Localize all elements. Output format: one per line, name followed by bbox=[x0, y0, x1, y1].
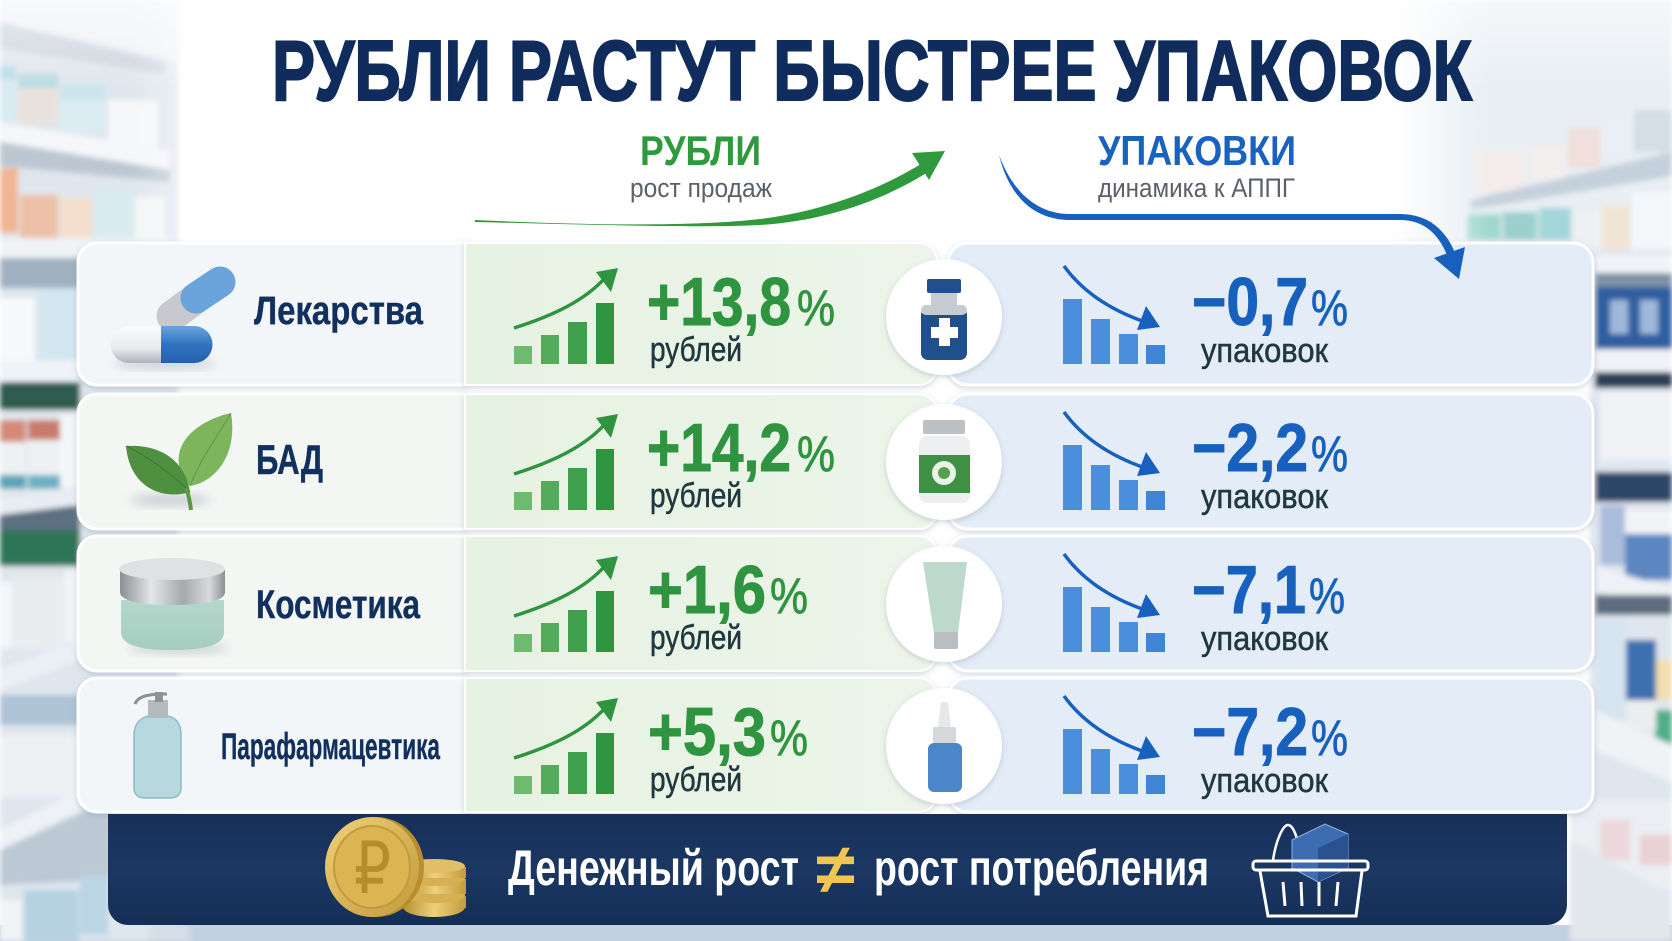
chart: growth bars bbox=[514, 414, 618, 510]
value: rubles bbox=[648, 694, 808, 799]
circle icon: medicine bottle bbox=[886, 259, 1002, 375]
value: packages: упаковок bbox=[1201, 620, 1329, 658]
value: packages: % bbox=[1311, 280, 1348, 336]
value: packages bbox=[1192, 694, 1348, 800]
circle icon: cosmetic tube bbox=[886, 546, 1002, 662]
panel: category bbox=[78, 536, 465, 671]
value: packages: −7,2 bbox=[1192, 694, 1308, 770]
label: Косметика bbox=[256, 583, 421, 627]
chart: declining bars bbox=[1063, 266, 1165, 364]
label: Парафармацевтика bbox=[221, 726, 440, 767]
value: packages bbox=[1192, 264, 1348, 370]
value: rubles bbox=[648, 552, 808, 657]
left shelves bbox=[0, 0, 178, 941]
chart: growth bars bbox=[514, 268, 618, 364]
arrow: rubles up bbox=[475, 151, 945, 226]
panel: category bbox=[78, 243, 465, 385]
value: rubles: % bbox=[797, 426, 835, 482]
icon: pump bottle bbox=[134, 692, 181, 798]
value: packages: упаковок bbox=[1201, 332, 1329, 370]
value: rubles: +5,3 bbox=[648, 694, 766, 770]
value: packages: упаковок bbox=[1201, 762, 1329, 800]
column heading: рубли: рост продаж bbox=[630, 173, 772, 203]
panel: rubles bbox=[465, 678, 937, 812]
icon: ruble coin and stack bbox=[325, 817, 466, 917]
value: rubles: +13,8 bbox=[647, 264, 791, 340]
row: Лекарства bbox=[78, 243, 1593, 385]
value: packages bbox=[1192, 410, 1348, 516]
value: rubles: % bbox=[770, 568, 808, 624]
panel: packages bbox=[948, 536, 1593, 671]
label: БАД bbox=[256, 436, 323, 483]
value: rubles: +1,6 bbox=[648, 552, 766, 628]
panel: category bbox=[78, 678, 465, 812]
fade overlays bbox=[130, 0, 260, 250]
value: packages: % bbox=[1311, 426, 1348, 482]
chart: growth bars bbox=[514, 698, 618, 794]
text: money growth: Денежный рост bbox=[508, 840, 799, 896]
row: Парафармацевтика bbox=[78, 678, 1593, 812]
symbol: not equal: ≠ bbox=[816, 830, 855, 908]
value: rubles: рублей bbox=[650, 331, 742, 369]
value: packages: −2,2 bbox=[1192, 410, 1308, 486]
circle icon: nasal spray bbox=[886, 688, 1002, 804]
panel: packages bbox=[948, 394, 1593, 529]
value: packages: % bbox=[1311, 710, 1348, 766]
value: packages: −0,7 bbox=[1192, 264, 1308, 340]
icon: cream jar bbox=[119, 558, 228, 654]
value: rubles: рублей bbox=[650, 619, 742, 657]
value: packages bbox=[1192, 552, 1345, 658]
banner: conclusion bbox=[108, 814, 1567, 925]
panel: rubles bbox=[465, 243, 937, 385]
column heading: упаковки: динамика к АППГ bbox=[1098, 173, 1295, 203]
circle icon: supplement jar bbox=[886, 404, 1002, 520]
chart: declining bars bbox=[1063, 412, 1165, 510]
column heading: упаковки: УПАКОВКИ bbox=[1098, 127, 1296, 174]
column heading: упаковки bbox=[1098, 127, 1296, 203]
column heading: рубли: РУБЛИ bbox=[640, 127, 761, 174]
chart: declining bars bbox=[1063, 554, 1165, 652]
value: rubles: +14,2 bbox=[647, 410, 791, 486]
value: rubles bbox=[647, 410, 835, 515]
panel: rubles bbox=[465, 536, 937, 671]
chart: growth bars bbox=[514, 556, 618, 652]
value: rubles: % bbox=[797, 280, 835, 336]
panel: packages bbox=[948, 678, 1593, 812]
text: consumption growth: рост потребления bbox=[874, 840, 1209, 896]
column heading: рубли bbox=[630, 127, 772, 203]
value: packages: −7,1 bbox=[1192, 552, 1306, 628]
icon: leaves bbox=[126, 413, 232, 510]
chart: declining bars bbox=[1063, 696, 1165, 794]
label: Лекарства bbox=[254, 289, 424, 333]
panel: rubles bbox=[465, 394, 937, 529]
value: packages: % bbox=[1309, 568, 1345, 624]
icon: ruble coin and stack: ₽ bbox=[354, 829, 391, 909]
value: rubles: % bbox=[770, 710, 808, 766]
value: packages: упаковок bbox=[1201, 478, 1329, 516]
arrow: packages down bbox=[999, 155, 1465, 279]
value: rubles: рублей bbox=[650, 761, 742, 799]
right shelves bbox=[1400, 0, 1672, 260]
value: rubles bbox=[647, 264, 835, 369]
icon: capsules bbox=[111, 282, 220, 369]
panel: category bbox=[78, 394, 465, 529]
icon: shopping basket bbox=[1253, 824, 1368, 916]
panel: packages bbox=[948, 243, 1593, 385]
row: Косметика bbox=[78, 536, 1593, 671]
value: rubles: рублей bbox=[650, 477, 742, 515]
row: БАД bbox=[78, 394, 1593, 529]
